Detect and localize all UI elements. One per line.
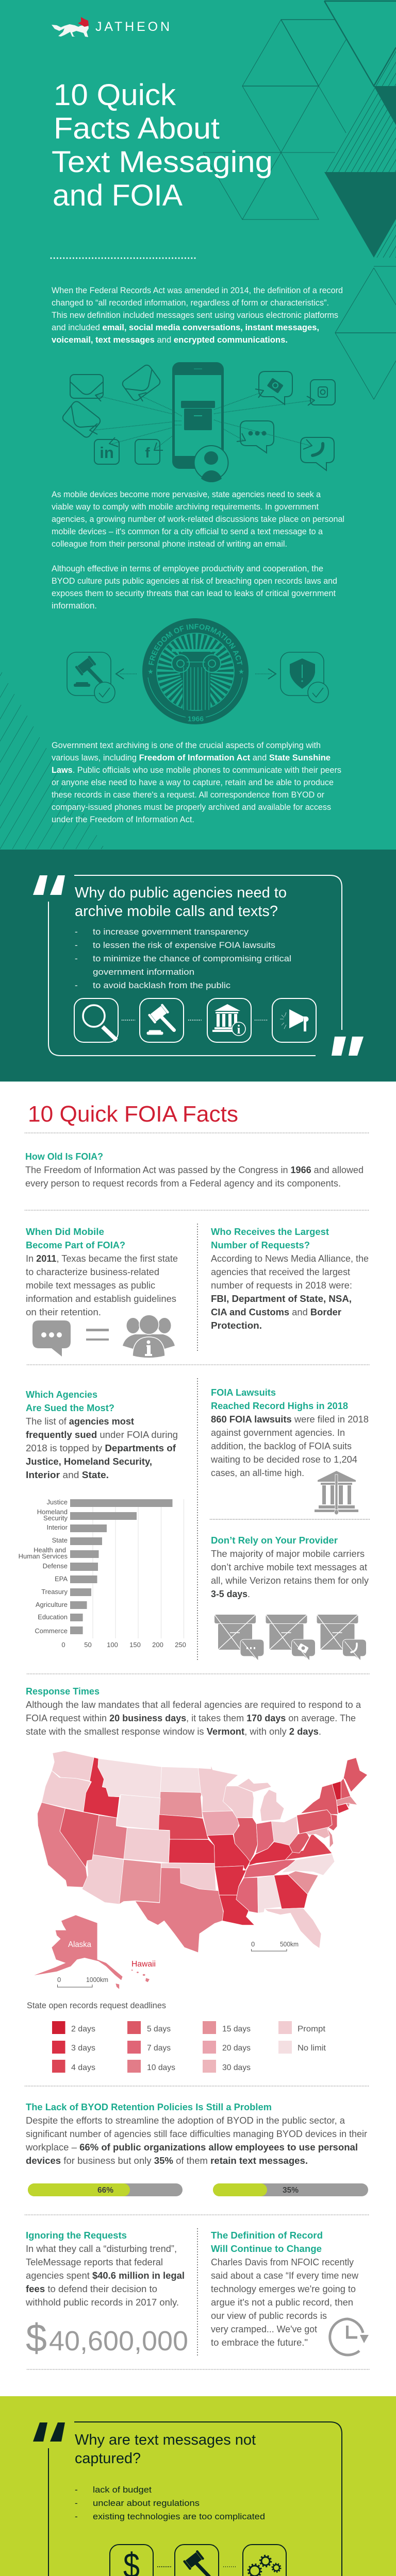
fact: when did mobile become part: information and establish guidelines	[26, 1294, 176, 1304]
fact: which agencies are sued: Which Agencies	[26, 1389, 97, 1400]
legend: state deadlines: State open records request deadlines	[27, 2001, 166, 2010]
big number: $40,600,000	[26, 2316, 188, 2360]
bar chart: agencies sued: 150	[129, 1641, 141, 1649]
bullet list: -	[75, 954, 78, 963]
text block: federal records act intro	[52, 285, 343, 345]
text block: government text archiving: under the Freedom of Information Act.	[52, 815, 194, 824]
text block: mobile devices: mobile devices – it's common for a city official to send a text message to a	[52, 527, 323, 536]
hawaii	[131, 1970, 150, 1982]
fact: FOIA lawsuits record highs: 860 FOIA lawsuits were filed in 2018	[211, 1414, 369, 1425]
fact: definition of record: technology emerges we're going to	[211, 2284, 356, 2294]
map labels and scale bars: 0	[57, 1976, 61, 1984]
icon: linkedin	[94, 439, 119, 464]
fact: FOIA lawsuits record highs: cases, an all-time high.	[211, 1468, 304, 1478]
icon: government building info: i	[237, 1023, 241, 1037]
text block: federal records act intro: This new definition included messages sent using various electronic platforms	[52, 310, 338, 320]
text block: BYOD risk: exposes them to security threats that can lead to leaks of critical government	[52, 588, 336, 598]
bullet list: -	[75, 927, 78, 937]
icon: gavel	[140, 998, 184, 1042]
alaska	[34, 1915, 123, 1989]
bar chart: agencies sued	[19, 1498, 186, 1649]
fact: which agencies are sued: The list of agencies most	[26, 1416, 134, 1427]
icon: government building info	[207, 998, 251, 1042]
fact: don't rely on provider	[211, 1535, 369, 1599]
icon: archive box	[181, 401, 215, 430]
legend: state deadlines: 15 days	[222, 2025, 251, 2033]
big number: $40,600,000: $	[26, 2316, 47, 2360]
icon: phone bubble	[301, 437, 334, 470]
fact: definition of record: our view of public records is	[211, 2311, 327, 2321]
icon: megaphone	[272, 998, 316, 1042]
bar chart: agencies sued: 50	[84, 1641, 92, 1649]
panel: cover background	[0, 0, 396, 850]
icon: facebook: f	[145, 445, 150, 461]
legend: state deadlines: No limit	[298, 2044, 326, 2053]
quote marks and frame	[33, 2422, 364, 2576]
fact: when did mobile become part: Become Part of FOIA?	[26, 1240, 125, 1250]
map labels and scale bars	[57, 1940, 299, 1987]
geometric triangles decoration, cover top right	[203, 1, 396, 399]
heading	[75, 2432, 256, 2467]
fact: lack of BYOD retention policies: significant number of agencies still face difficulties managing BYOD devices in their	[26, 2129, 367, 2139]
text block: government text archiving: company-issued phones must be properly archived and available for access	[52, 802, 331, 812]
fact: FOIA lawsuits record highs: addition, the backlog of FOIA suits	[211, 1441, 352, 1451]
title: Facts About	[54, 112, 220, 145]
bar chart: agencies sued: 250	[175, 1641, 186, 1649]
panel: 10 quick foia facts	[0, 1082, 396, 2396]
heading: Why do public agencies need to	[75, 885, 287, 901]
icon: clock	[330, 2319, 369, 2355]
bullet list: -	[75, 2485, 78, 2495]
arrow: left	[116, 669, 137, 679]
bar chart: agencies sued: 200	[152, 1641, 163, 1649]
bar chart: agencies sued: Human Services	[19, 1552, 68, 1560]
fact: how old is FOIA: every person to request records from a Federal agency and its components.	[25, 1178, 341, 1189]
fact: when did mobile become part: to characterize business-related	[26, 1267, 159, 1277]
fact: response times: Although the law mandates that all federal agencies are required to respond to a	[26, 1700, 361, 1710]
fact: ignoring the requests	[25, 2230, 185, 2308]
fact: FOIA lawsuits record highs: Reached Record Highs in 2018	[211, 1401, 348, 1411]
fact: FOIA lawsuits record highs	[210, 1387, 369, 1478]
text block: mobile devices: colleague from their personal phone instead of writing an email.	[52, 539, 287, 549]
bar chart: agencies sued: Justice	[47, 1498, 68, 1506]
icon: linkedin: in	[100, 444, 114, 462]
seal: freedom of information act	[142, 618, 249, 724]
legend: state deadlines: 10 days	[147, 2063, 175, 2072]
progress bar: 35%: 35%	[283, 2186, 299, 2195]
icons: envelopes	[61, 364, 315, 450]
map labels and scale bars: Alaska	[68, 1940, 91, 1949]
icon: phone	[172, 362, 224, 469]
heading	[75, 885, 287, 920]
fact: who receives largest requests: CIA and Customs and Border	[211, 1307, 341, 1317]
fact: which agencies are sued: Interior and State.	[26, 1470, 109, 1480]
bar chart: agencies sued: Education	[38, 1613, 68, 1621]
icon: instagram	[310, 380, 335, 405]
choropleth map: state response deadlines	[34, 1751, 368, 1989]
fact: ignoring the requests: In what they call a “disturbing trend”,	[26, 2244, 177, 2254]
fact: who receives largest requests: Protection.	[211, 1320, 262, 1331]
panel: why not captured	[0, 2396, 396, 2576]
bar chart: agencies sued: Treasury	[41, 1588, 68, 1596]
legend: state deadlines: 2 days	[71, 2025, 95, 2033]
fact: don't rely on provider: don’t archive mobile text messages at	[211, 1562, 367, 1572]
logo: Jatheon fox and wordmark: JATHEON	[95, 20, 170, 34]
title: Text Messaging	[52, 145, 273, 179]
logo: Jatheon fox and wordmark	[52, 17, 170, 37]
fact: which agencies are sued: Justice, Homeland Security,	[26, 1456, 152, 1467]
fact: definition of record: to embrace the future."	[211, 2337, 308, 2348]
fact: response times: state with the smallest response window is Vermont, with only 2 days.	[26, 1726, 321, 1737]
fact: response times: FOIA request within 20 business days, it takes them 170 days on average. The	[26, 1713, 356, 1723]
bar chart: agencies sued: Commerce	[35, 1627, 68, 1635]
bar chart: agencies sued: 0	[61, 1641, 65, 1649]
seal column	[172, 649, 221, 710]
icon: user avatar	[194, 446, 228, 482]
seal: freedom of information act: ★	[147, 668, 154, 675]
heading: archive mobile calls and texts?	[75, 903, 278, 920]
progress bar: 35%	[213, 2183, 368, 2196]
heading: 10 Quick FOIA Facts	[28, 1101, 238, 1127]
fact: lack of BYOD retention policies: devices for business but only 35% of them retain text messages.	[26, 2156, 308, 2166]
bullet list: government information	[93, 967, 194, 977]
bullet list: -	[75, 940, 78, 950]
legend: state deadlines: 7 days	[147, 2044, 171, 2053]
icon: camera bubble	[259, 371, 292, 404]
fact: don't rely on provider: The majority of major mobile carriers	[211, 1549, 365, 1559]
icon: bubble equals people	[32, 1315, 175, 1358]
icon: facebook	[135, 439, 160, 464]
fact: definition of record: The Definition of Record	[211, 2230, 323, 2241]
bullet list	[75, 2485, 265, 2521]
progress bar: 66%	[28, 2183, 183, 2196]
title: 10 Quick	[54, 78, 176, 112]
legend: state deadlines: Prompt	[298, 2025, 326, 2033]
fact: definition of record	[211, 2230, 359, 2348]
bar chart: agencies sued: State	[52, 1536, 68, 1544]
bar chart: agencies sued: Agriculture	[36, 1601, 68, 1608]
fact: lack of BYOD retention policies	[25, 2102, 367, 2166]
text block: mobile devices: As mobile devices become more pervasive, state agencies need to seek a	[52, 489, 321, 499]
text block: federal records act intro: changed to “all recorded information, regardless of form or characteristics”.	[52, 298, 329, 308]
bar chart: agencies sued: Health and	[34, 1546, 66, 1554]
fact: ignoring the requests: withhold public records in 2017 only.	[25, 2297, 179, 2308]
text block: government text archiving: or anyone else need to have a way to capture, retain and be able to produce	[52, 777, 334, 787]
heading: captured?	[75, 2450, 141, 2467]
text block: federal records act intro: When the Federal Records Act was amended in 2014, the definition of a record	[52, 285, 343, 295]
fact: who receives largest requests: Who Receives the Largest	[211, 1227, 329, 1237]
text block: BYOD risk	[52, 564, 337, 611]
fact: who receives largest requests: FBI, Department of State, NSA,	[211, 1294, 352, 1304]
fact: ignoring the requests: TeleMessage reports that federal	[26, 2257, 163, 2267]
bar chart: agencies sued: Interior	[47, 1523, 68, 1531]
seal: freedom of information act: FREEDOM OF INFORMATION ACT	[148, 623, 242, 666]
fact: when did mobile become part: When Did Mobile	[26, 1227, 104, 1237]
title	[52, 78, 273, 212]
seal: freedom of information act: 1966	[188, 715, 204, 723]
legend: state deadlines	[27, 2001, 326, 2073]
panel: why archive	[0, 850, 396, 1082]
bullet list: to avoid backlash from the public	[93, 980, 231, 990]
fact: don't rely on provider: Don’t Rely on Your Provider	[211, 1535, 338, 1546]
bullet list: unclear about regulations	[93, 2498, 200, 2508]
fact: when did mobile become part: mobile text messages as public	[26, 1280, 155, 1291]
map labels and scale bars: 1000km	[86, 1976, 108, 1984]
map labels and scale bars: Hawaii	[131, 1960, 156, 1969]
fact: when did mobile become part: In 2011, Texas became the first state	[26, 1253, 178, 1264]
bullet list: to increase government transparency	[93, 927, 249, 937]
text block: BYOD risk: Although effective in terms of employee productivity and cooperation, the	[52, 564, 323, 573]
bullet list: to lessen the risk of expensive FOIA lawsuits	[93, 940, 275, 950]
fact: lack of BYOD retention policies: Despite the efforts to streamline the adoption of BYOD in the public sector, a	[26, 2115, 345, 2126]
icon: chat bubble	[240, 421, 274, 453]
map labels and scale bars: 500km	[280, 1940, 299, 1948]
progress bar: 66%: 66%	[97, 2186, 113, 2195]
text block: mobile devices: agencies, a growing number of work-related discussions take place on personal	[52, 514, 344, 524]
fact: which agencies are sued	[26, 1389, 178, 1480]
fact: response times: Response Times	[26, 1686, 100, 1697]
icon: dollar	[110, 2545, 153, 2576]
fact: don't rely on provider: 3-5 days.	[211, 1589, 250, 1599]
seal: freedom of information act: ★	[238, 668, 244, 675]
icon: magnifier	[74, 998, 118, 1042]
fact: definition of record: Will Continue to Change	[211, 2244, 322, 2254]
fact: don't rely on provider: all, while Verizon retains them for only	[211, 1575, 369, 1586]
bar chart: agencies sued: Homeland	[37, 1508, 68, 1516]
diagonal hatch decoration bottom left of cover	[0, 672, 103, 849]
icon: gears	[243, 2545, 286, 2576]
bullet list: -	[75, 2512, 78, 2521]
fact: when did mobile become part	[26, 1227, 178, 1317]
text block: government text archiving: Government text archiving is one of the crucial aspects of complying with	[52, 740, 321, 750]
bar chart: agencies sued: Security	[43, 1514, 68, 1522]
text block: federal records act intro: voicemail, text messages and encrypted communications.	[52, 335, 288, 345]
fact: lack of BYOD retention policies: The Lack of BYOD Retention Policies Is Still a Problem	[26, 2102, 272, 2112]
illustration: phone archive with channels	[61, 362, 335, 482]
legend: state deadlines: 20 days	[222, 2044, 251, 2053]
text block: government text archiving	[52, 740, 341, 824]
fact: ignoring the requests: agencies spent $40.6 million in legal	[26, 2270, 185, 2281]
bullet list: -	[75, 980, 78, 990]
text block: federal records act intro: and included email, social media conversations, instant messages,	[52, 323, 319, 332]
icon: crossed archive box, phone	[317, 1615, 366, 1660]
fact: which agencies are sued: 2018 is topped by Departments of	[26, 1443, 176, 1453]
heading: Why are text messages not	[75, 2432, 256, 2448]
legend: state deadlines: 30 days	[222, 2063, 251, 2072]
fact: which agencies are sued: frequently sued under FOIA during	[26, 1430, 178, 1440]
fact: ignoring the requests: fees to defend their decision to	[26, 2284, 157, 2294]
text block: BYOD risk: information.	[52, 601, 97, 611]
fact: who receives largest requests: agencies that received the largest	[211, 1267, 350, 1277]
text block: government text archiving: Laws. Public officials who use mobile phones to communicate with their peers	[52, 765, 341, 775]
fact: definition of record: said about a case “If every time new	[211, 2270, 359, 2281]
bar chart: agencies sued: Defense	[43, 1562, 68, 1570]
title: and FOIA	[53, 179, 183, 212]
quote marks and frame	[33, 875, 364, 1056]
fact: definition of record: Charles Davis from NFOIC recently	[211, 2257, 354, 2267]
fact: ignoring the requests: Ignoring the Requests	[26, 2230, 127, 2241]
bullet list: existing technologies are too complicated	[93, 2512, 265, 2521]
text block: mobile devices: viable way to comply with mobile archiving requirements. In government	[52, 502, 319, 512]
fact: FOIA lawsuits record highs: against government agencies. In	[211, 1428, 345, 1438]
icon: gavel	[175, 2545, 219, 2576]
fact: how old is FOIA: How Old Is FOIA?	[25, 1151, 103, 1162]
fact: which agencies are sued: Are Sued the Most?	[26, 1403, 114, 1413]
legend: state deadlines: 4 days	[71, 2063, 95, 2072]
legend: state deadlines: 3 days	[71, 2044, 95, 2053]
map labels and scale bars: 0	[251, 1940, 255, 1948]
fact: when did mobile become part: on their retention.	[26, 1307, 101, 1317]
icon: crossed archive box, camera	[266, 1615, 316, 1660]
fact: FOIA lawsuits record highs: waiting to be decided rose to 1,204	[210, 1454, 357, 1465]
text block: BYOD risk: BYOD culture puts public agencies at risk of breaching open records laws and	[52, 576, 337, 586]
icon: crossed archive box, chat	[214, 1615, 264, 1660]
bullet list: to minimize the chance of compromising critical	[93, 954, 291, 963]
fact: how old is FOIA: The Freedom of Information Act was passed by the Congress in 1966 and allowed	[25, 1165, 364, 1175]
bar chart: agencies sued: EPA	[55, 1575, 68, 1583]
fact: who receives largest requests: According to News Media Alliance, the	[211, 1253, 369, 1264]
text block: mobile devices	[52, 489, 344, 549]
icon: shield with check	[280, 652, 328, 703]
text block: government text archiving: these records in case there's a request. All correspondence from BYOD or	[52, 790, 324, 800]
icon: courthouse with sword	[315, 1471, 358, 1515]
fact: who receives largest requests	[211, 1227, 369, 1331]
icon: gavel with check	[67, 652, 115, 703]
fact: FOIA lawsuits record highs: FOIA Lawsuits	[211, 1387, 276, 1398]
fact: how old is FOIA	[25, 1151, 364, 1189]
fact: definition of record: very cramped... We've got	[211, 2324, 317, 2334]
legend: state deadlines: 5 days	[147, 2025, 171, 2033]
bullet list: lack of budget	[93, 2485, 152, 2495]
big number: $40,600,000: 40,600,000	[49, 2326, 188, 2357]
fact: response times	[26, 1686, 361, 1737]
fact: definition of record: argue it's not a public record, then	[211, 2297, 353, 2308]
arrow: right	[255, 669, 276, 679]
bullet list: -	[75, 2498, 78, 2508]
fact: who receives largest requests: Number of Requests?	[211, 1240, 310, 1250]
fact: who receives largest requests: number of requests in 2018 were:	[211, 1280, 352, 1291]
fact: lack of BYOD retention policies: workplace – 66% of public organizations allow employees to use personal	[25, 2142, 358, 2153]
bullet list	[75, 927, 291, 990]
bar chart: agencies sued: 100	[107, 1641, 118, 1649]
text block: government text archiving: various laws, including Freedom of Information Act and State Sunshine	[52, 753, 331, 762]
